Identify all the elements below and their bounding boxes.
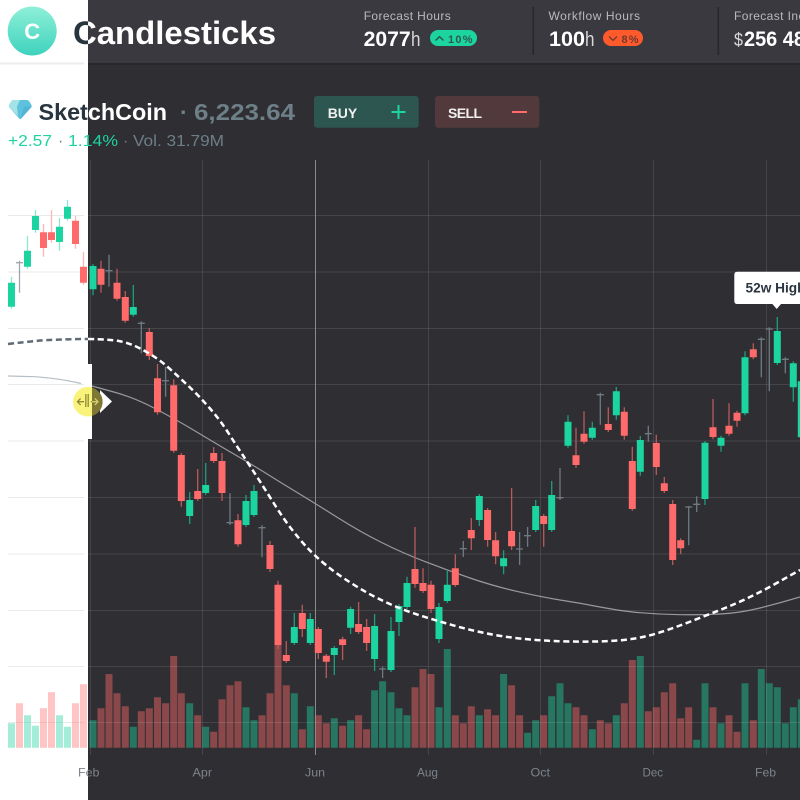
dashed trend line (88, 339, 800, 642)
stat: forecast hours: 2077 (364, 28, 411, 51)
stat: forecast income (734, 9, 800, 51)
light bodies: falling (44, 221, 84, 283)
doji candles (106, 255, 789, 678)
crosshair line (314, 160, 316, 755)
x axis labels: Oct (530, 766, 551, 780)
handle glyph, light half (77, 394, 92, 407)
coin change, light side: 1.14% (68, 133, 118, 150)
grid lines (88, 160, 800, 755)
light bodies: rising (12, 207, 68, 307)
header bar (0, 0, 800, 65)
light header rule (0, 62, 84, 64)
light theme panel (0, 0, 88, 800)
logo badge (8, 6, 57, 56)
stat: forecast income: $ (734, 30, 743, 50)
title, light side: Candlesticks (73, 15, 276, 51)
light candlesticks (12, 200, 84, 309)
light wicks: rising (12, 200, 68, 309)
stat: workflow hours: 100 (549, 28, 585, 51)
x axis labels: Aug (417, 766, 438, 780)
candlesticks (93, 255, 800, 678)
light grid lines (8, 216, 84, 722)
x axis labels: Dec (642, 766, 663, 780)
x axis labels: Jun (305, 766, 325, 780)
coin change, light side (8, 135, 88, 146)
candle wicks: rising (93, 264, 793, 675)
comparison slider handle (73, 364, 112, 439)
candle bodies: falling (101, 269, 753, 662)
light doji (16, 261, 23, 293)
candle wicks: falling (101, 261, 753, 678)
handle highlight, light half (73, 387, 92, 417)
tooltip: 52w high (734, 272, 800, 309)
stat: workflow hours: h (585, 29, 594, 51)
sell button: SELL (448, 105, 482, 121)
coin price: · (180, 99, 188, 125)
x axis labels (78, 766, 776, 780)
sell button (435, 96, 539, 128)
light volume bars (12, 684, 84, 748)
light thin moving average (8, 376, 81, 384)
coin change, light side: +2.57 (8, 133, 52, 150)
stat: workflow hours: Workflow Hours (548, 9, 640, 23)
coin change: 1.14% (68, 133, 118, 150)
coin change: +2.57 (8, 133, 52, 150)
logo badge: C (24, 19, 40, 44)
buy button (314, 96, 419, 128)
stat: forecast hours (364, 9, 477, 51)
handle glyph, dark half (92, 398, 98, 405)
icon: diamond (9, 100, 32, 120)
title: Candlesticks (73, 15, 276, 51)
volume bars (93, 645, 800, 748)
stat: workflow hours (548, 9, 643, 51)
coin change, light side: · (58, 133, 63, 150)
stat: forecast hours: h (411, 29, 420, 51)
stat: workflow hours: 8% (622, 34, 639, 46)
candle bodies: rising (93, 266, 800, 670)
coin name: SketchCoin (38, 99, 167, 125)
light dashed trend line (8, 339, 88, 344)
coin change: Vol. 31.79M (133, 133, 224, 150)
coin name, light side: SketchCoin (38, 99, 167, 125)
stat: forecast hours: Forecast Hours (364, 9, 451, 23)
coin change: · (58, 133, 63, 150)
x axis labels: Feb (755, 766, 776, 780)
light axis label: Feb (78, 766, 100, 780)
stat: forecast hours: 10% (448, 34, 473, 46)
x axis labels: Feb (78, 766, 100, 780)
coin change (8, 133, 224, 150)
handle highlight, dark half (92, 388, 103, 416)
thin moving average line (92, 386, 800, 615)
coin price: 6,223.64 (194, 99, 295, 125)
x axis labels: Apr (192, 766, 212, 780)
buy button: BUY (328, 105, 358, 121)
light wicks: falling (44, 210, 84, 285)
coin change: · (123, 133, 128, 150)
